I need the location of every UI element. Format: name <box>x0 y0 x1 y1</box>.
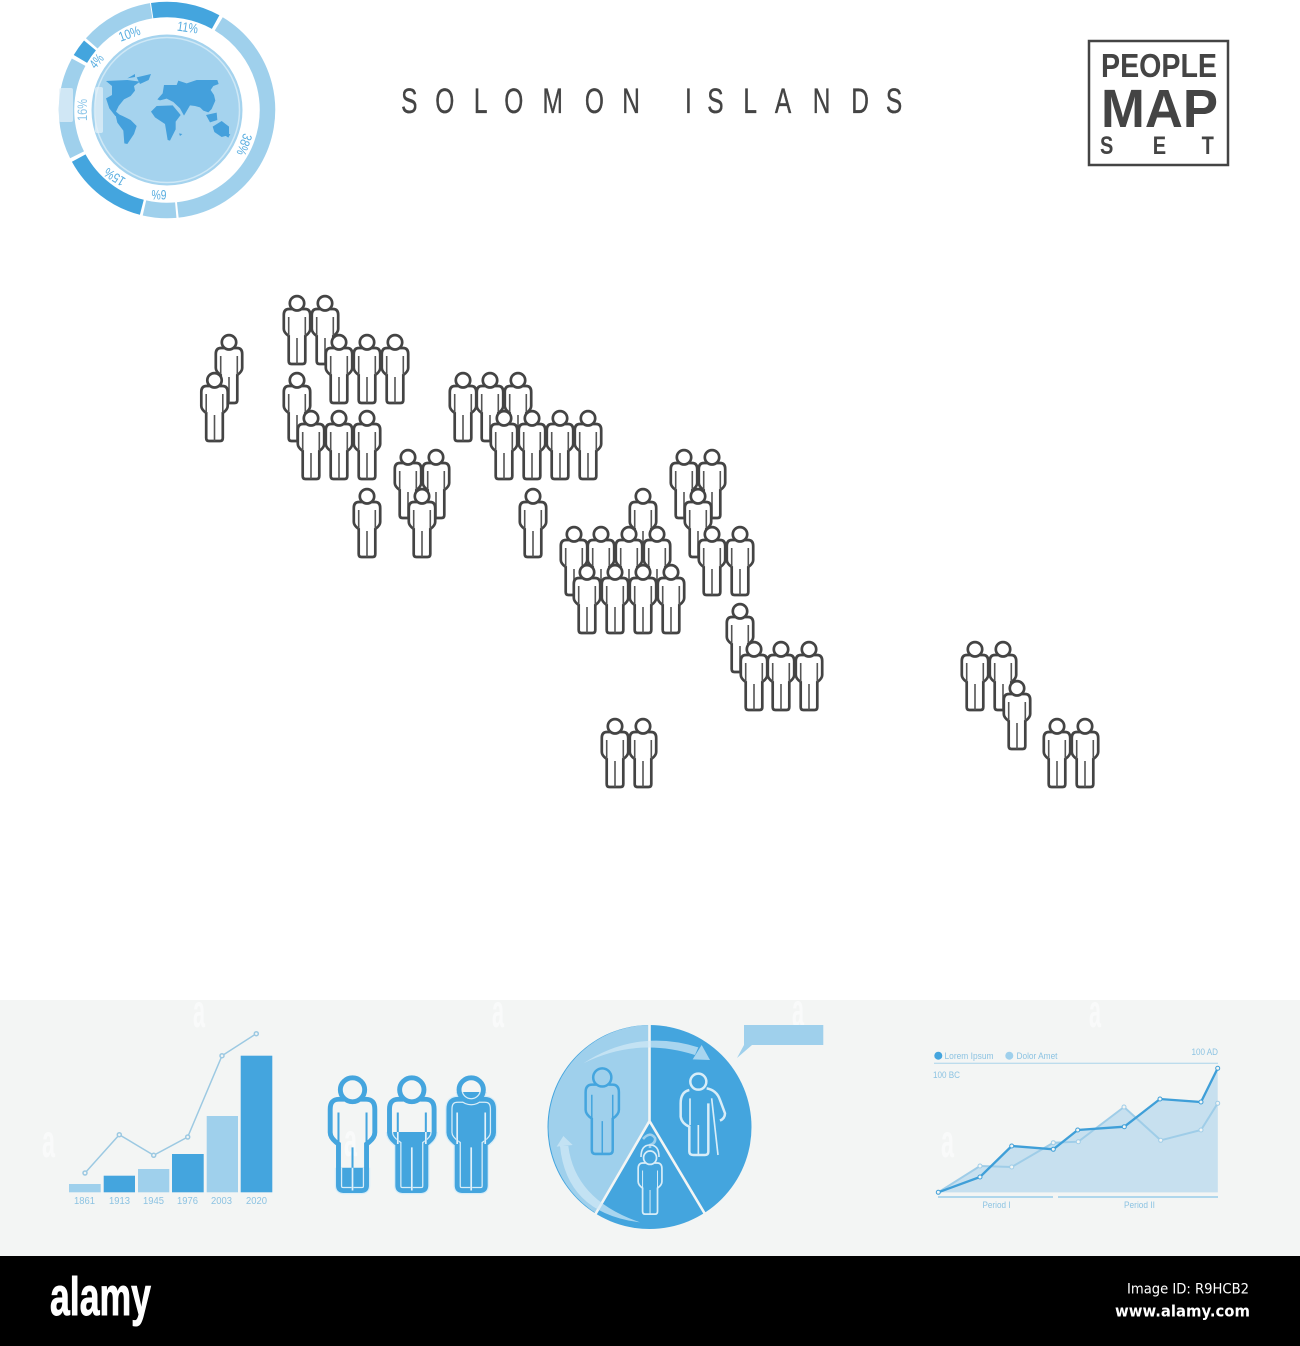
donut chart: world percentages <box>25 0 309 252</box>
island group: Choiseul north <box>284 296 408 403</box>
donut percentage labels: 15% <box>101 165 128 189</box>
island group: Shortland <box>201 335 242 441</box>
elderly icon with cane <box>681 1074 725 1155</box>
website: www.alamy.com <box>1115 1302 1250 1321</box>
pie segments <box>548 1024 752 1229</box>
donut percentage labels: 11% <box>176 19 199 36</box>
badge: people map set: SET <box>1100 132 1214 160</box>
bars <box>69 1056 272 1192</box>
age pie chart <box>548 1024 823 1229</box>
watermark letters: a <box>344 1114 357 1166</box>
island group: Santa Cruz south <box>1044 719 1098 787</box>
title: SOLOMON ISLANDS <box>401 83 902 121</box>
area line chart <box>933 1047 1220 1210</box>
people map of the Solomon Islands <box>201 296 1098 787</box>
person icon: full fill <box>449 1078 494 1191</box>
watermark letters <box>42 984 1101 1167</box>
island group: Santa Cruz north <box>962 642 1030 749</box>
island group: Guadalcanal <box>561 489 684 633</box>
year labels: 1945 <box>143 1196 164 1207</box>
watermark letters: a <box>42 1115 55 1167</box>
badge: people map set <box>1089 41 1228 165</box>
inner globe disc <box>92 34 242 186</box>
legend: Dolor Amet <box>1016 1051 1058 1061</box>
light series line <box>938 1101 1220 1192</box>
donut percentage labels: 10% <box>117 23 142 45</box>
trend line <box>83 1032 258 1175</box>
speech bubble <box>737 1025 823 1058</box>
legend: Lorem Ipsum <box>944 1051 994 1061</box>
person icon: low fill <box>330 1078 375 1191</box>
island group: Rendova <box>354 489 380 557</box>
text: a <box>1089 985 1101 1037</box>
legend <box>934 1051 1058 1061</box>
period axis and labels: Period II <box>1124 1200 1155 1210</box>
donut percentage labels: 38% <box>233 132 255 157</box>
top axis and range labels: 100 AD <box>1192 1047 1218 1057</box>
period axis and labels: Period I <box>982 1200 1010 1210</box>
island group: Malaita <box>671 450 753 595</box>
watermark patches on donut <box>59 87 103 133</box>
shaded areas <box>938 1068 1218 1192</box>
footer bar <box>0 1256 1300 1346</box>
island group: New Georgia <box>395 450 449 557</box>
cycle arrows <box>557 1041 710 1222</box>
adult icon <box>586 1068 619 1154</box>
child icon <box>638 1135 662 1214</box>
watermark letters: a <box>792 984 804 1036</box>
island group: Russell <box>520 489 546 557</box>
year labels: 2003 <box>211 1196 232 1207</box>
alamy logo: alamy <box>50 1267 151 1327</box>
top axis and range labels: 100 BC <box>933 1070 960 1080</box>
bottom panel background <box>0 1000 1300 1256</box>
person icon: half fill <box>389 1078 434 1191</box>
image id: Image ID: R9HCB2 <box>1127 1281 1249 1297</box>
donut percentage labels: 4% <box>86 51 107 71</box>
donut ring segments <box>25 0 309 252</box>
year labels: 1861 <box>74 1196 95 1207</box>
watermark letters: a <box>492 985 504 1037</box>
year labels <box>74 1196 267 1207</box>
year labels: 1913 <box>109 1196 130 1207</box>
badge: people map set: MAP <box>1101 79 1218 139</box>
watermark letters: a <box>193 985 205 1037</box>
donut percentage labels: 16% <box>75 99 90 121</box>
island group: Rennell <box>602 719 656 787</box>
watermark letters: a <box>941 1115 954 1167</box>
top axis and range labels <box>933 1047 1218 1080</box>
dark series line <box>936 1066 1220 1194</box>
period axis and labels <box>938 1197 1218 1210</box>
badge: people map set: PEOPLE <box>1101 47 1217 84</box>
bar and line chart <box>69 1032 272 1207</box>
donut percentage labels: 6% <box>152 187 166 202</box>
three filled person icons <box>330 1078 494 1191</box>
year labels: 2020 <box>246 1196 267 1207</box>
island group: Choiseul south <box>284 373 380 479</box>
island group: Santa Isabel <box>450 373 601 479</box>
donut percentage labels <box>75 19 255 202</box>
year labels: 1976 <box>177 1196 198 1207</box>
island group: Makira <box>727 604 822 710</box>
world map continents <box>106 74 230 144</box>
